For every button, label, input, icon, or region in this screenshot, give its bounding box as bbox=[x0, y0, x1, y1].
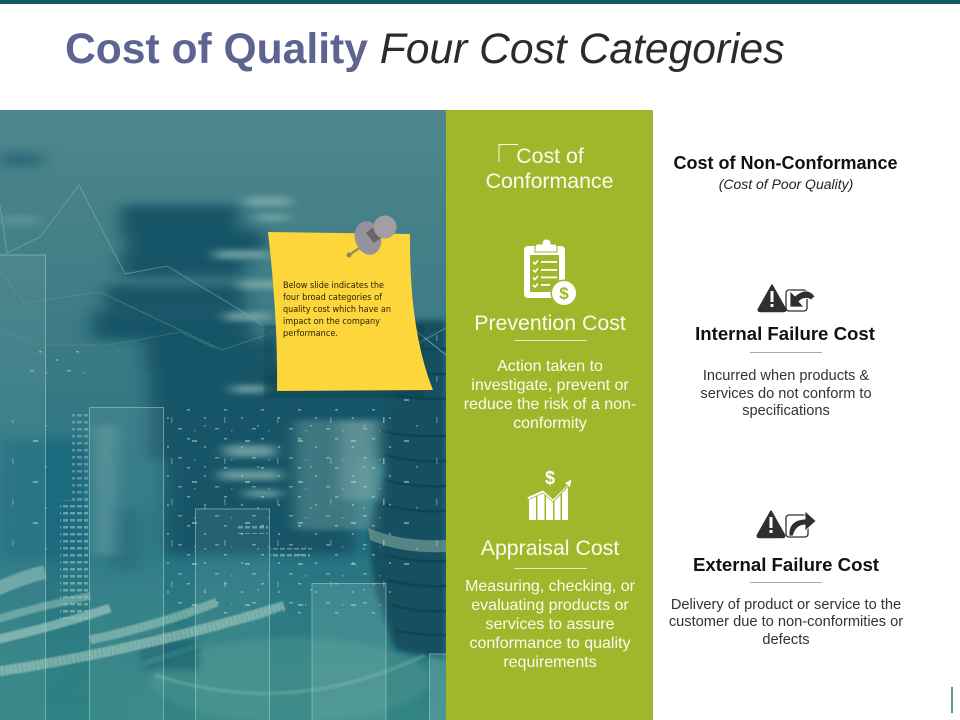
text: internal failure description: services do not conform to bbox=[700, 386, 872, 402]
note shadow bbox=[264, 325, 424, 398]
top accent bar bbox=[0, 0, 960, 4]
text: external failure description: defects bbox=[762, 632, 810, 648]
note paper bbox=[268, 232, 433, 391]
icon: warning triangle with return arrow bbox=[758, 285, 816, 312]
text: internal failure description: Incurred when products & bbox=[703, 368, 869, 384]
note text: impact on the company bbox=[283, 316, 380, 326]
sticky note with pin bbox=[264, 216, 433, 398]
heading: prevention cost: Prevention Cost bbox=[474, 311, 626, 335]
title: Cost of Quality Four Cost Categories bbox=[65, 25, 785, 73]
text: appraisal cost description: conformance to quality bbox=[470, 635, 630, 652]
translucent chart bars bbox=[0, 255, 460, 720]
text: prevention cost description: investigate, prevent or bbox=[471, 377, 629, 394]
coin stack on the right bbox=[368, 320, 446, 660]
sloping coins lower left bbox=[0, 572, 284, 692]
heading: internal failure cost: Internal Failure Cost bbox=[695, 323, 875, 344]
text: prevention cost description: Action taken to bbox=[497, 358, 603, 375]
heading: external failure cost: External Failure Cost bbox=[693, 554, 879, 575]
text: external failure description: Delivery of product or service to the bbox=[671, 597, 901, 613]
icon: clipboard with dollar coin bbox=[524, 239, 578, 306]
note text: performance. bbox=[283, 328, 338, 338]
overlaid trend lines bbox=[0, 185, 446, 355]
data speckle bbox=[165, 405, 395, 620]
note text: quality cost which have an bbox=[283, 304, 391, 314]
divider bbox=[750, 352, 822, 353]
text: prevention cost description: reduce the risk of a non- bbox=[464, 396, 636, 413]
icon: rising chart with dollar bbox=[527, 468, 572, 520]
text: appraisal cost description: requirements bbox=[503, 654, 597, 671]
heading text: Conformance bbox=[486, 169, 613, 193]
icon: push pin bbox=[346, 216, 396, 258]
heading: appraisal cost: Appraisal Cost bbox=[481, 536, 619, 560]
corner bracket bbox=[499, 144, 518, 162]
subheading: cost of poor quality: (Cost of Poor Quality) bbox=[719, 176, 853, 192]
divider bbox=[750, 582, 822, 583]
panel: cost of conformance heading bbox=[486, 144, 613, 193]
panel: green cost of conformance column bbox=[446, 110, 653, 720]
divider bbox=[514, 340, 587, 341]
panel: background photo of coins and charts bbox=[0, 110, 460, 720]
text: appraisal cost description: Measuring, checking, or bbox=[465, 578, 636, 595]
icon: rising chart with dollar: $ bbox=[545, 468, 555, 488]
note text: Below slide indicates the bbox=[283, 280, 384, 290]
slide number marker bbox=[951, 687, 953, 713]
heading text: Cost of bbox=[516, 144, 584, 168]
heading: cost of non-conformance: Cost of Non-Conformance bbox=[674, 153, 898, 173]
note text: four broad categories of bbox=[283, 292, 383, 302]
icon: clipboard with dollar coin: $ bbox=[559, 284, 569, 303]
divider bbox=[514, 568, 587, 569]
text: internal failure description: specifications bbox=[742, 403, 830, 419]
text: external failure description: customer due to non-conformities or bbox=[669, 614, 903, 630]
text: prevention cost description: conformity bbox=[513, 415, 587, 432]
text: appraisal cost description: services to assure bbox=[486, 616, 615, 633]
lower coin disc bbox=[150, 638, 430, 720]
text: appraisal cost description: evaluating products or bbox=[471, 597, 629, 614]
icon: warning triangle with forward arrow bbox=[757, 511, 816, 538]
